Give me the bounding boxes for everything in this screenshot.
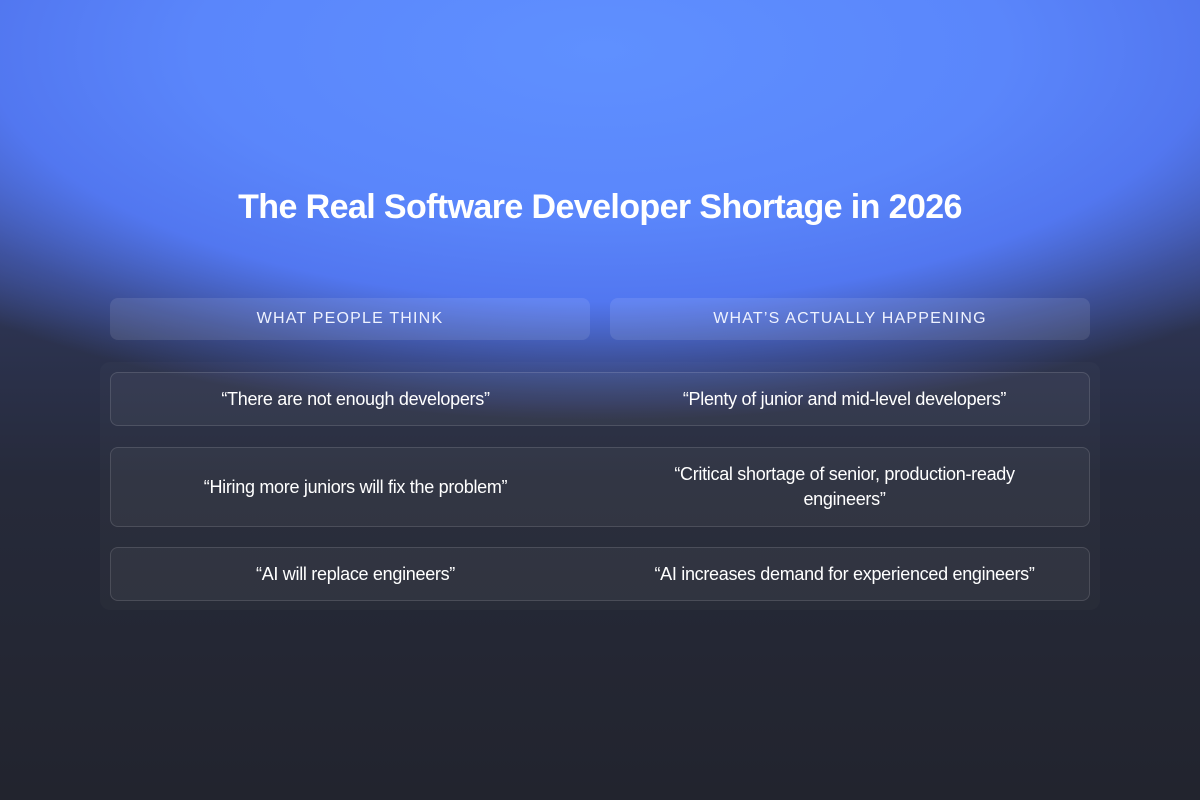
row 1 <box>110 372 1090 426</box>
row 2: “Hiring more juniors will fix the problem” <box>204 476 507 496</box>
row 2: “Critical shortage of senior, production-ready engineers” <box>674 464 1015 509</box>
header: what's actually happening: WHAT’S ACTUALLY HAPPENING <box>713 310 987 327</box>
row 3: “AI increases demand for experienced engineers” <box>654 564 1035 584</box>
comparison panel <box>100 362 1100 610</box>
title: The Real Software Developer Shortage in 2026 <box>238 188 962 226</box>
row 3: “AI will replace engineers” <box>256 564 455 584</box>
header: what's actually happening <box>610 298 1090 340</box>
row 1: “There are not enough developers” <box>221 388 490 408</box>
header: what people think <box>110 298 590 340</box>
row 1: “Plenty of junior and mid-level developers” <box>683 388 1006 408</box>
row 2 <box>110 447 1090 527</box>
row 3 <box>110 547 1090 601</box>
header: what people think: WHAT PEOPLE THINK <box>257 310 443 327</box>
